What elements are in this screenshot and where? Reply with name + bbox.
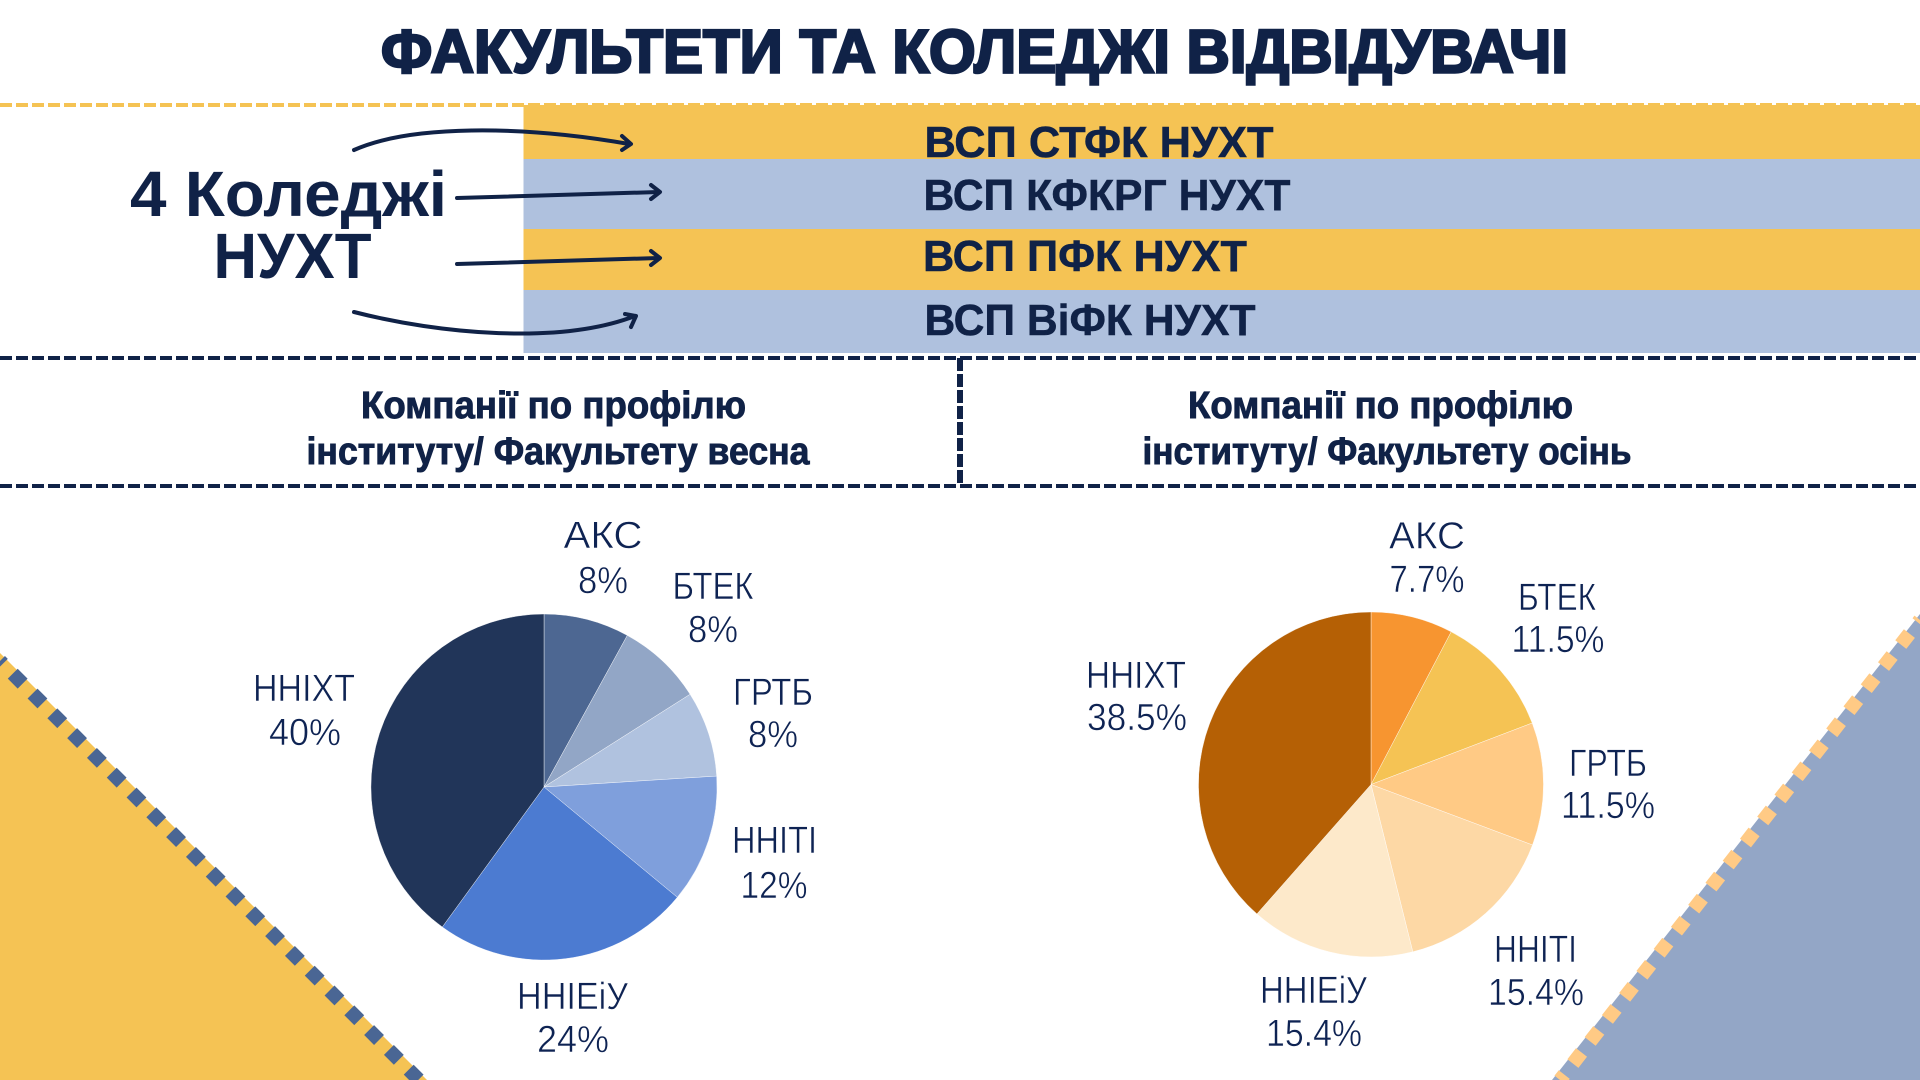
label: ГРТБ 8% xyxy=(733,672,813,756)
label: ННІХТ 40% xyxy=(253,668,355,754)
label: ННІЕіУ 15.4%: ННІЕіУ xyxy=(1260,970,1368,1012)
arrows from heading to bars xyxy=(354,130,660,334)
subheading: spring: інституту/ Факультету весна xyxy=(306,431,810,473)
bar: ВСП ПФК НУХТ xyxy=(524,229,1920,290)
bar: ВСП КФКРГ НУХТ xyxy=(524,159,1920,229)
label: АКС 7.7% xyxy=(1389,516,1465,601)
label: БТЕК 8% xyxy=(672,566,754,651)
arrow 3 xyxy=(457,251,660,265)
label: ННІТІ 12%: 12% xyxy=(740,865,808,907)
arrow 1 xyxy=(354,130,631,150)
pie chart: spring xyxy=(371,614,717,960)
subheading: spring: Компанії по профілю xyxy=(361,385,746,427)
arrow 2 xyxy=(457,185,660,199)
label: ННІХТ 40%: 40% xyxy=(269,712,341,754)
label: ННІЕіУ 15.4% xyxy=(1260,970,1368,1055)
panel: colleges list xyxy=(524,105,1920,353)
label: ГРТБ 11.5% xyxy=(1561,743,1655,827)
label: ННІЕіУ 15.4%: 15.4% xyxy=(1266,1013,1362,1055)
label: ННІЕіУ 24% xyxy=(517,976,629,1061)
bar: ВСП ПФК НУХТ: ВСП ПФК НУХТ xyxy=(923,232,1247,281)
label: АКС 8%: АКС xyxy=(564,515,642,557)
label: ННІТІ 15.4%: 15.4% xyxy=(1488,972,1584,1014)
label: ННІЕіУ 24%: 24% xyxy=(537,1019,609,1061)
label: АКС 7.7%: АКС xyxy=(1389,516,1465,558)
heading: 4 Коледжі НУХТ xyxy=(130,158,447,292)
label: БТЕК 11.5%: БТЕК xyxy=(1518,577,1596,619)
label: ННІТІ 15.4%: ННІТІ xyxy=(1494,929,1577,971)
bar: ВСП ВіФК НУХТ: ВСП ВіФК НУХТ xyxy=(924,296,1256,345)
label: ННІХТ 38.5% xyxy=(1086,655,1187,739)
subheading: autumn: Компанії по профілю xyxy=(1188,385,1573,427)
label: ННІТІ 15.4% xyxy=(1488,929,1584,1014)
arrow 4 xyxy=(354,312,636,334)
label: ННІХТ 40%: ННІХТ xyxy=(253,668,355,710)
label: ННІТІ 12% xyxy=(732,820,817,907)
label: БТЕК 8%: БТЕК xyxy=(672,566,754,608)
label: ГРТБ 11.5%: 11.5% xyxy=(1561,785,1655,827)
label: ГРТБ 11.5%: ГРТБ xyxy=(1569,743,1647,785)
bar: ВСП КФКРГ НУХТ: ВСП КФКРГ НУХТ xyxy=(924,171,1291,220)
title: ФАКУЛЬТЕТИ ТА КОЛЕДЖІ ВІДВІДУВАЧІ xyxy=(381,18,1568,86)
heading: 4 Коледжі НУХТ: НУХТ xyxy=(214,220,372,292)
label: ННІТІ 12%: ННІТІ xyxy=(732,820,817,862)
label: ННІХТ 38.5%: ННІХТ xyxy=(1086,655,1186,697)
labels: autumn pie xyxy=(1086,516,1655,1055)
label: БТЕК 11.5% xyxy=(1512,577,1604,661)
label: БТЕК 8%: 8% xyxy=(688,609,738,651)
label: АКС 7.7%: 7.7% xyxy=(1390,559,1464,601)
label: ГРТБ 8%: 8% xyxy=(748,714,798,756)
bar: ВСП ВіФК НУХТ xyxy=(524,290,1920,353)
bar: ВСП СТФК НУХТ xyxy=(524,105,1920,167)
subheading: spring xyxy=(306,385,810,473)
pie chart: autumn xyxy=(1198,612,1543,957)
decorative corner: yellow triangle with dashed edge xyxy=(0,653,427,1080)
label: ННІЕіУ 24%: ННІЕіУ xyxy=(517,976,629,1018)
label: АКС 8%: 8% xyxy=(578,560,628,602)
decorative corner: blue triangle with dashed edge xyxy=(1552,614,1920,1080)
subheading: autumn xyxy=(1142,385,1632,473)
label: БТЕК 11.5%: 11.5% xyxy=(1512,619,1604,661)
label: ГРТБ 8%: ГРТБ xyxy=(733,672,813,714)
label: ННІХТ 38.5%: 38.5% xyxy=(1087,697,1187,739)
heading: 4 Коледжі НУХТ: 4 Коледжі xyxy=(130,158,447,230)
subheading: autumn: інституту/ Факультету осінь xyxy=(1142,431,1632,473)
label: АКС 8% xyxy=(564,515,642,602)
labels: spring pie xyxy=(253,515,817,1061)
bar: ВСП СТФК НУХТ: ВСП СТФК НУХТ xyxy=(924,118,1274,167)
